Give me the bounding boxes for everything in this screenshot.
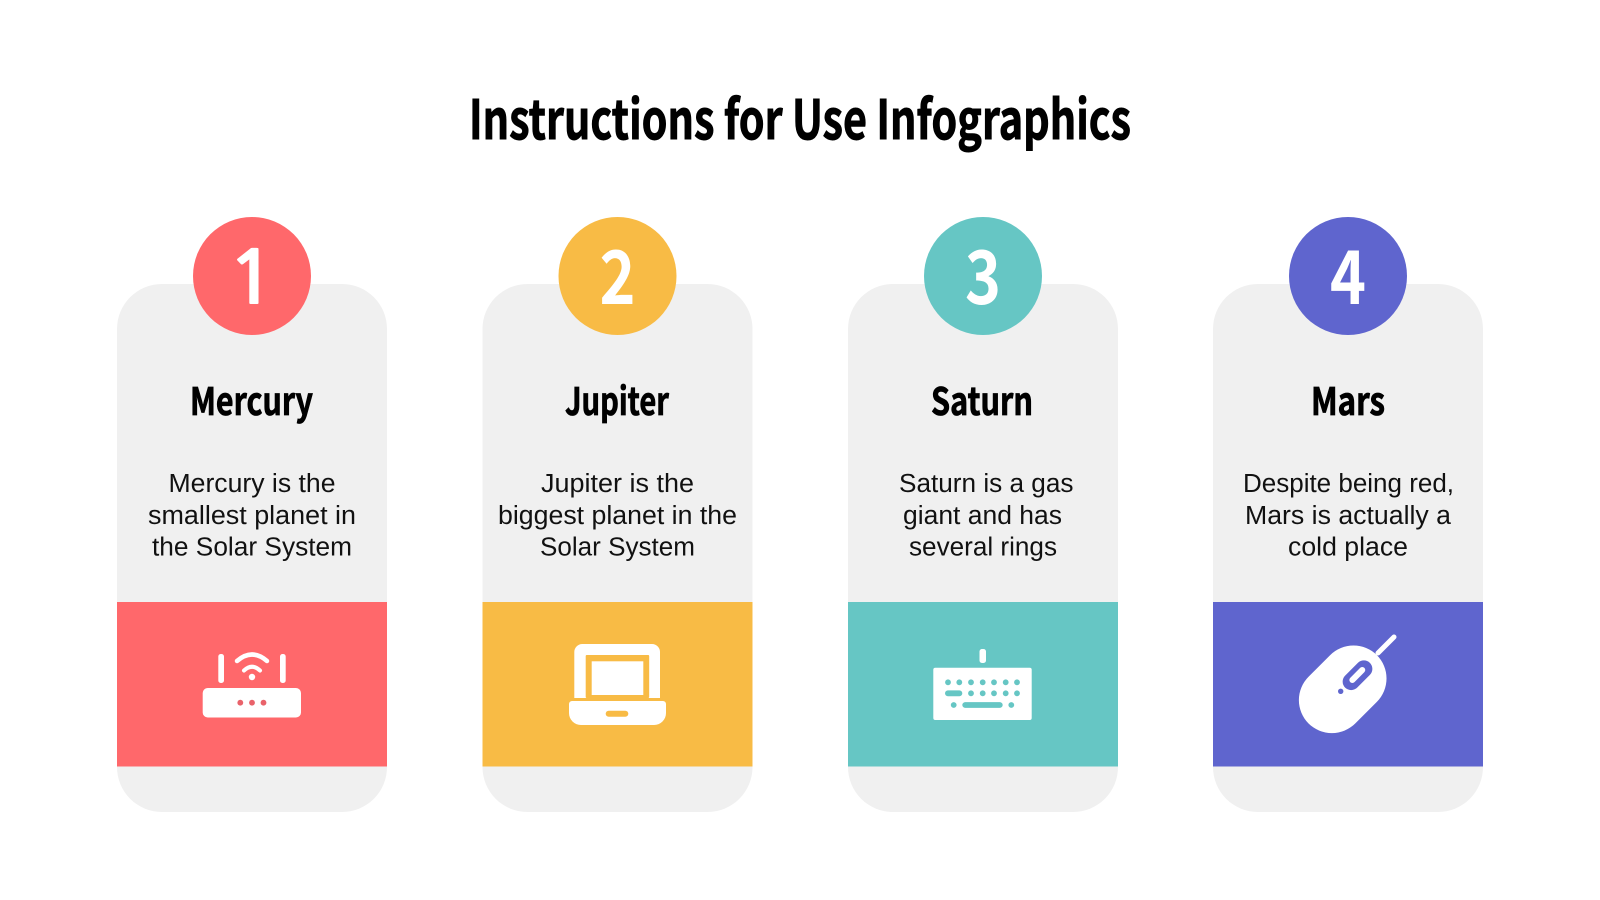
description: Jupiter: Solar System [540,534,695,562]
description: Mars: cold place [1288,534,1408,562]
description: Jupiter: Jupiter is the [541,470,694,498]
description: Mercury: smallest planet in [148,502,356,530]
heading: Saturn: Saturn [931,371,1033,426]
card background [848,284,1118,812]
colour band [1213,602,1483,766]
colour band [482,602,752,766]
description: Jupiter: biggest planet in the [498,502,737,530]
description: Mars: Despite being red, [1243,470,1454,498]
description: Mercury [148,470,356,562]
heading: Mars: Mars [1311,371,1385,426]
icon: computer mouse [1285,632,1400,747]
colour band [848,602,1118,766]
heading: Jupiter: Jupiter [565,371,669,426]
panel: Mercury [117,217,387,812]
number badge 4: 4 [1330,219,1366,326]
colour band [117,602,387,766]
number badge 3 [924,217,1042,335]
panel: Jupiter [482,217,752,812]
description: Mercury: Mercury is the [168,470,336,498]
panel: Saturn [848,217,1118,812]
description: Mercury: the Solar System [152,534,352,562]
number badge 3: 3 [965,219,1001,326]
title: Instructions for Use Infographics [469,76,1131,155]
description: Saturn: giant and has [903,502,1062,530]
number badge 2 [558,217,676,335]
heading: Mercury: Mercury [190,371,313,426]
card background [1213,284,1483,812]
description: Mars: Mars is actually a [1245,502,1452,530]
icon: keyboard [933,649,1032,720]
icon: wifi router [203,654,301,718]
panel: Mars [1213,217,1483,812]
description: Saturn [899,470,1074,562]
number badge 1: 1 [226,243,278,316]
number badge 4 [1289,217,1407,335]
description: Saturn: several rings [909,534,1057,562]
card background [482,284,752,812]
number badge 2: 2 [600,219,636,326]
description: Mars [1243,470,1454,562]
number badge 1 [193,217,311,335]
description: Saturn: Saturn is a gas [899,470,1074,498]
icon: laptop [569,644,666,725]
card background [117,284,387,812]
description: Jupiter [498,470,737,562]
